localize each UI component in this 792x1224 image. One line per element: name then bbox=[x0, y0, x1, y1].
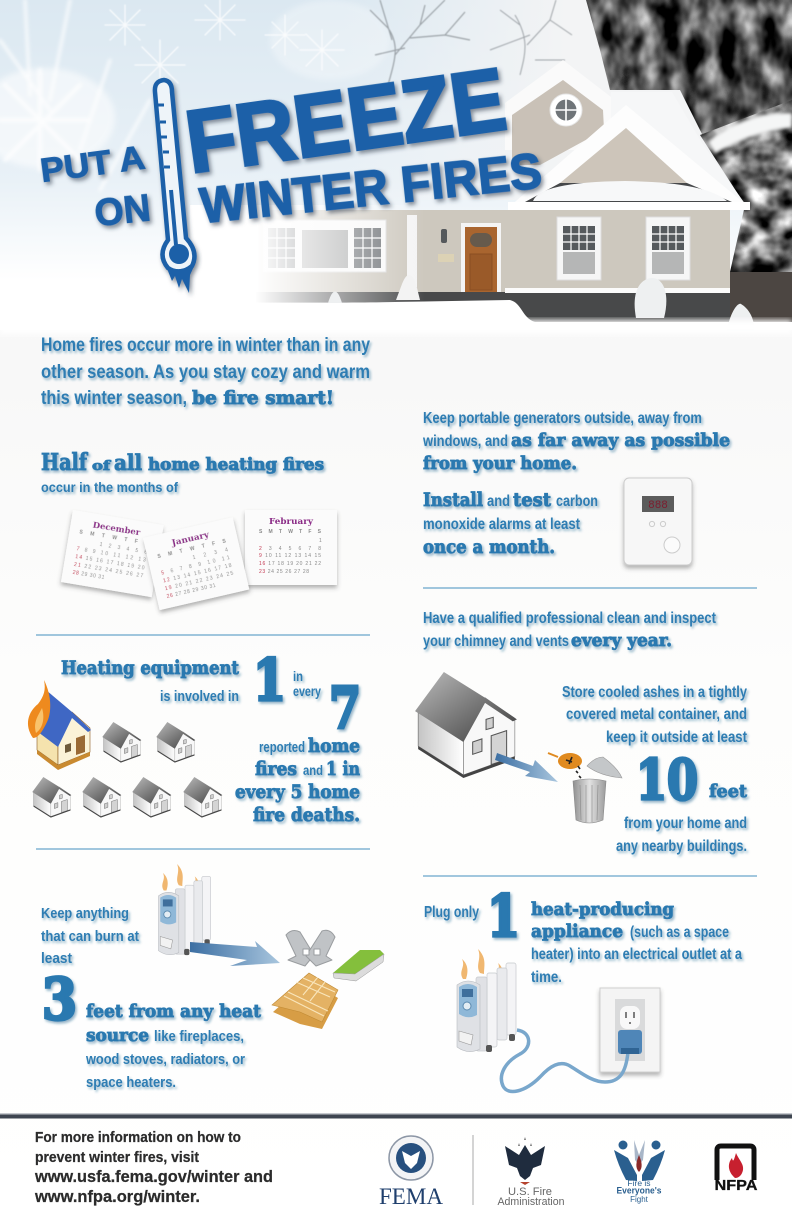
tip: keep anything 3 feet: feet from any heat bbox=[86, 1001, 262, 1022]
door bbox=[461, 223, 501, 298]
icon: metal trash can bbox=[573, 779, 606, 823]
tip: chimney inspection bbox=[423, 610, 716, 651]
tip: store cooled ashes: feet bbox=[709, 781, 748, 802]
tip: keep anything 3 feet: 3 bbox=[42, 966, 77, 1033]
header winter scene bbox=[0, 0, 792, 334]
stat: heating equipment 1 in every 7: home bbox=[308, 735, 360, 757]
calendar: february bbox=[245, 510, 337, 585]
title bbox=[38, 49, 544, 293]
snow drifts and shrubs bbox=[0, 275, 792, 331]
title: put a: PUT A bbox=[38, 139, 147, 189]
calendar: january: 1 2 3 4 bbox=[192, 547, 229, 561]
tip: store cooled ashes: keep it outside at least bbox=[606, 729, 747, 746]
calendar: december: S M T W T F S bbox=[79, 529, 150, 547]
calendar: january: 5 6 7 8 9 10 11 bbox=[161, 555, 231, 577]
calendar: february: 1 bbox=[319, 538, 322, 544]
tip: plug only 1 appliance: appliance bbox=[531, 921, 623, 942]
logo: U.S. Fire Administration: Administration bbox=[498, 1196, 564, 1208]
tip: carbon monoxide alarms: monoxide alarms at least bbox=[423, 516, 580, 533]
calendar: december bbox=[61, 510, 164, 597]
tip: portable generators: as far away as possible bbox=[511, 430, 730, 451]
tip: store cooled ashes: 10 bbox=[636, 747, 698, 812]
icon: wall outlet bbox=[501, 988, 660, 1092]
half of all home heating fires: of bbox=[92, 459, 112, 474]
tip: keep anything 3 feet: Keep anything bbox=[41, 905, 129, 922]
calendar: february: 2 3 4 5 6 7 8 bbox=[259, 546, 321, 552]
calendar: february: 9 10 11 12 13 14 15 bbox=[259, 553, 321, 559]
tip: portable generators bbox=[422, 410, 730, 474]
half of all home heating fires: Half bbox=[41, 449, 89, 476]
tip: keep anything 3 feet: source bbox=[86, 1025, 149, 1046]
tip: keep anything 3 feet: least bbox=[41, 950, 72, 967]
icon: thermometer bbox=[155, 80, 196, 293]
footer text: www.nfpa.org/winter. bbox=[34, 1187, 200, 1206]
tip: portable generators: Keep portable generators outside, away from bbox=[423, 410, 702, 427]
logo: NFPA: NFPA bbox=[714, 1177, 758, 1194]
intro paragraph: this winter season, bbox=[41, 387, 187, 409]
tip: portable generators: from your home. bbox=[423, 453, 577, 474]
icon: metal can lid bbox=[587, 757, 622, 778]
icon: heater with arrow to flammable items bbox=[158, 864, 384, 1029]
stat: heating equipment 1 in every 7 bbox=[61, 647, 361, 826]
tip: carbon monoxide alarms: and bbox=[487, 493, 510, 510]
tip: store cooled ashes: Store cooled ashes in a tightly bbox=[562, 684, 747, 701]
half of all home heating fires bbox=[41, 449, 324, 495]
footer rule bbox=[0, 1113, 792, 1118]
tip: keep anything 3 feet bbox=[41, 905, 262, 1091]
stat: heating equipment 1 in every 7: every 5 home bbox=[235, 781, 360, 803]
icon: carbon monoxide alarm: 888 bbox=[648, 500, 668, 512]
stat: heating equipment 1 in every 7: Heating equipment bbox=[61, 657, 239, 679]
calendars bbox=[61, 510, 337, 610]
tip: keep anything 3 feet: that can burn at bbox=[41, 928, 139, 945]
footer text: For more information on how to bbox=[35, 1129, 241, 1146]
icy snowflake sparkle background bbox=[105, 0, 344, 90]
stat: heating equipment 1 in every 7: reported bbox=[259, 739, 305, 756]
title: freeze: FREEZE bbox=[180, 49, 512, 192]
tip: carbon monoxide alarms bbox=[423, 489, 598, 558]
right windows bbox=[557, 217, 690, 280]
calendar: december: December bbox=[92, 521, 141, 538]
calendar: february: 23 24 25 26 27 28 bbox=[259, 569, 309, 575]
calendar: february: February bbox=[269, 517, 314, 527]
tip: plug only 1 appliance: 1 bbox=[487, 883, 520, 950]
intro paragraph: other season. As you stay cozy and warm bbox=[41, 361, 370, 383]
stat: heating equipment 1 in every 7: 7 bbox=[329, 675, 361, 742]
calendar: january: S M T W T F S bbox=[157, 538, 227, 560]
icon: ash shovel bbox=[548, 753, 582, 778]
stat: heating equipment 1 in every 7: fire deaths. bbox=[253, 804, 360, 826]
intro paragraph: Home fires occur more in winter than in any bbox=[41, 334, 370, 356]
intro paragraph bbox=[41, 334, 370, 409]
tip: store cooled ashes: any nearby buildings. bbox=[616, 838, 747, 855]
tip: keep anything 3 feet: wood stoves, radiators, or bbox=[85, 1051, 245, 1068]
calendar: december: 21 22 23 24 25 26 27 bbox=[73, 562, 144, 579]
logo: Fire is Everyone's Fight: Everyone's bbox=[616, 1186, 662, 1196]
calendar: january: 12 13 14 15 16 17 18 bbox=[163, 563, 232, 584]
tip: carbon monoxide alarms: Install bbox=[423, 489, 483, 511]
half of all home heating fires: home heating fires bbox=[148, 455, 324, 474]
footer text bbox=[34, 1129, 273, 1206]
stat: heating equipment 1 in every 7: and bbox=[303, 762, 323, 778]
icon: plaid blanket bbox=[272, 973, 338, 1029]
calendar: february: S M T W T F S bbox=[259, 529, 322, 535]
calendar: december: 1 2 3 4 5 6 bbox=[99, 542, 148, 556]
calendar: december: 28 29 30 31 bbox=[72, 570, 105, 581]
tip: plug only 1 appliance: heater) into an electrical outlet at a bbox=[531, 946, 742, 963]
tip: plug only 1 appliance: (such as a space bbox=[630, 924, 729, 941]
tip: store cooled ashes: covered metal container, and bbox=[566, 706, 747, 723]
calendar: january: 26 27 28 29 30 31 bbox=[166, 583, 217, 600]
evergreen trees bbox=[586, 0, 792, 272]
half of all home heating fires: all bbox=[114, 450, 142, 475]
stat: heating equipment 1 in every 7: 1 bbox=[253, 647, 286, 714]
tip: carbon monoxide alarms: test bbox=[513, 489, 551, 511]
icons: house row of six gray houses bbox=[32, 722, 222, 818]
logo: U.S. Fire Administration bbox=[498, 1137, 564, 1208]
big window bbox=[263, 220, 386, 272]
bare winter trees bbox=[370, 0, 572, 85]
logo: NFPA bbox=[714, 1146, 758, 1194]
stat: heating equipment 1 in every 7: in bbox=[293, 668, 303, 684]
icon: green book bbox=[333, 950, 384, 981]
calendar: january: January bbox=[170, 530, 211, 549]
calendar: february: 16 17 18 19 20 21 22 bbox=[259, 561, 321, 567]
logo: Fire is Everyone's Fight bbox=[614, 1140, 665, 1204]
tip: carbon monoxide alarms: once a month. bbox=[423, 536, 555, 558]
tip: plug only 1 appliance: time. bbox=[531, 969, 562, 986]
logo: FEMA bbox=[379, 1136, 443, 1209]
tip: chimney inspection: Have a qualified professional clean and inspect bbox=[423, 610, 716, 627]
house bbox=[200, 60, 750, 322]
title: winter fires: WINTER FIRES bbox=[197, 142, 544, 234]
logo: U.S. Fire Administration: U.S. Fire bbox=[508, 1186, 552, 1198]
fence bbox=[730, 272, 792, 322]
tip: store cooled ashes bbox=[562, 684, 748, 855]
intro paragraph: be fire smart! bbox=[192, 388, 334, 409]
tip: carbon monoxide alarms: carbon bbox=[556, 493, 598, 510]
logo: Fire is Everyone's Fight: Fire is bbox=[627, 1178, 651, 1188]
pale sky behind house bbox=[340, 0, 792, 200]
tip: plug only 1 appliance: Plug only bbox=[424, 904, 479, 921]
tip: plug only 1 appliance: heat-producing bbox=[531, 899, 674, 920]
tip: portable generators: windows, and bbox=[422, 433, 508, 450]
logo: Fire is Everyone's Fight: Fight bbox=[630, 1195, 649, 1204]
icon: burning house bbox=[28, 680, 91, 770]
icon: carbon monoxide alarm bbox=[624, 478, 692, 565]
tip: keep anything 3 feet: like fireplaces, bbox=[154, 1028, 244, 1045]
footer text: prevent winter fires, visit bbox=[35, 1149, 199, 1166]
stat: heating equipment 1 in every 7: fires bbox=[255, 758, 297, 780]
tip: keep anything 3 feet: space heaters. bbox=[86, 1074, 176, 1091]
tip: chimney inspection: your chimney and vents bbox=[423, 633, 569, 650]
tip: plug only 1 appliance bbox=[424, 883, 742, 986]
title: on: ON bbox=[93, 187, 153, 235]
stat: heating equipment 1 in every 7: every bbox=[293, 683, 321, 699]
calendar: january bbox=[143, 517, 249, 610]
footer text: www.usfa.fema.gov/winter and bbox=[34, 1167, 273, 1186]
calendar: december: 7 8 9 10 11 12 13 bbox=[76, 546, 146, 564]
stat: heating equipment 1 in every 7: 1 in bbox=[326, 758, 360, 780]
tip: chimney inspection: every year. bbox=[571, 630, 672, 651]
icon: heater plugged into outlet bbox=[457, 949, 660, 1092]
logo: FEMA: FEMA bbox=[379, 1184, 443, 1209]
left fade into snow bbox=[255, 205, 425, 305]
icon: gloves bbox=[286, 930, 335, 966]
icon: large house with ashes arrow bbox=[415, 672, 622, 823]
calendar: january: 19 20 21 22 23 24 25 bbox=[164, 571, 234, 592]
tip: store cooled ashes: from your home and bbox=[624, 815, 747, 832]
stat: heating equipment 1 in every 7: is involved in bbox=[160, 688, 239, 705]
half of all home heating fires: occur in the months of bbox=[41, 479, 178, 495]
calendar: december: 14 15 16 17 18 19 20 bbox=[75, 554, 145, 572]
